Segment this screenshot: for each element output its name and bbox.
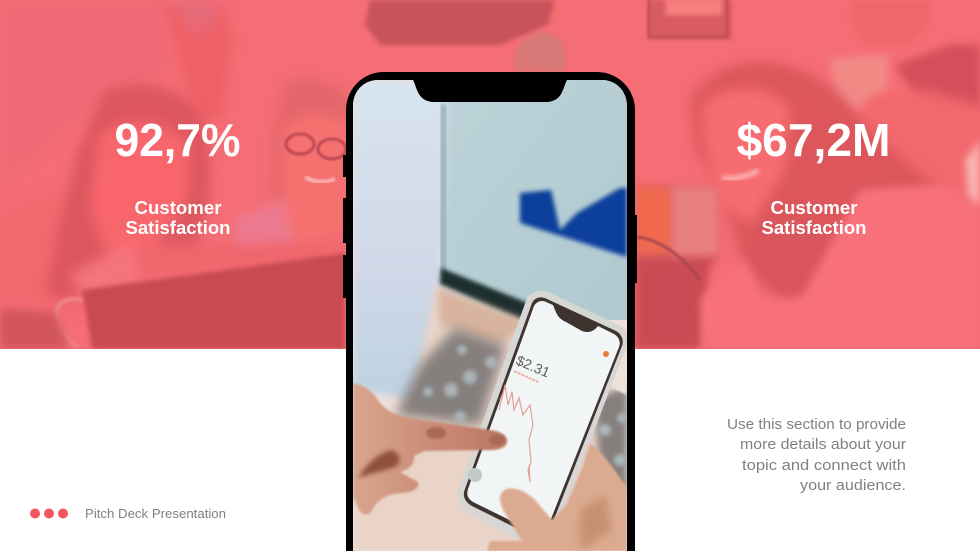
blurred keyboard keys	[423, 345, 497, 423]
orange badge on smartphone	[603, 351, 609, 357]
avatar on smartphone	[468, 468, 482, 482]
smartphone bezel	[464, 297, 623, 538]
value 92,7%: 92,7%	[114, 114, 240, 166]
phone side buttons	[343, 155, 637, 298]
footer dots	[30, 508, 68, 518]
stat: right metric	[736, 114, 890, 238]
body text: your audience.	[800, 478, 906, 494]
knuckle detail	[426, 427, 446, 439]
phone body	[346, 72, 635, 551]
steering-like wheel detail in right photo	[637, 237, 700, 280]
left hand pointing	[353, 383, 507, 515]
phone notch outline	[413, 80, 567, 102]
picture frame detail in right photo	[649, 0, 727, 37]
phone screen photo	[353, 80, 628, 551]
footer label: Pitch Deck Presentation	[85, 506, 226, 521]
label	[762, 197, 866, 238]
label	[126, 197, 230, 238]
handheld smartphone in photo	[457, 291, 628, 547]
body text: more details about your	[740, 437, 906, 453]
label: Customer	[770, 197, 858, 218]
label: Customer	[134, 197, 222, 218]
body text: Use this section to provide	[727, 417, 906, 433]
phone mockup	[343, 72, 637, 551]
body text	[727, 417, 906, 494]
smile in left photo	[305, 177, 335, 182]
body text: topic and connect with	[742, 458, 906, 474]
red tinted team photo banner	[0, 0, 980, 349]
mug in left photo	[56, 299, 82, 349]
smile in right photo	[722, 170, 758, 179]
red caption on smartphone	[514, 371, 538, 382]
glasses in left photo	[286, 134, 346, 159]
label: Satisfaction	[126, 217, 230, 238]
dark laptop in left photo	[82, 253, 345, 349]
blurred blue chart on monitor	[520, 188, 627, 257]
label: Satisfaction	[762, 217, 866, 238]
stat: left metric	[114, 114, 240, 238]
stock line on smartphone	[499, 385, 533, 482]
value $67,2M: $67,2M	[736, 114, 890, 166]
fingernail	[489, 435, 505, 445]
balance figure on smartphone: $2.31	[514, 352, 553, 381]
finger shadows	[358, 450, 400, 478]
right hand holding smartphone	[487, 443, 627, 551]
smartphone silver frame	[457, 291, 628, 547]
thumb shadow	[580, 495, 612, 551]
smartphone display	[467, 301, 620, 533]
